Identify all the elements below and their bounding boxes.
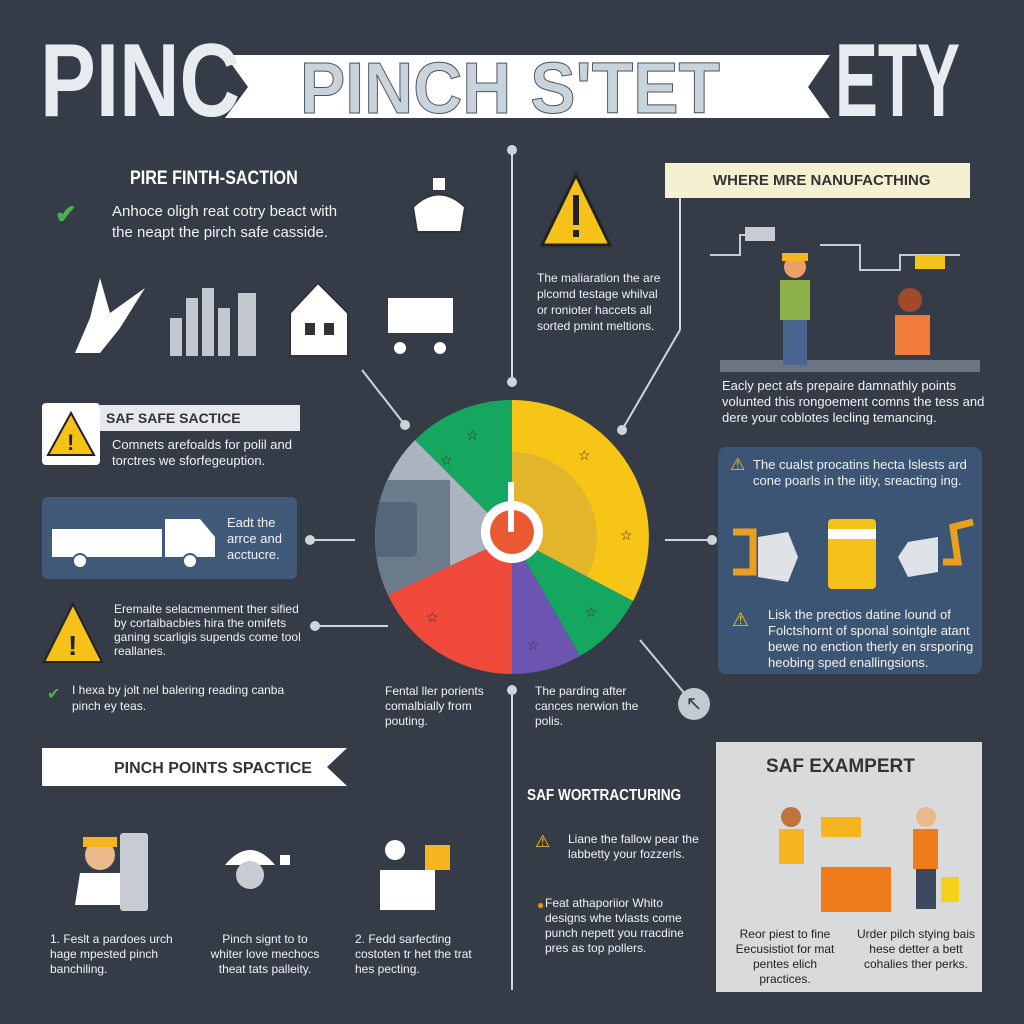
section: pire finth-saction [55, 168, 337, 241]
heading: saf wortracturing: SAF WORTRACTURING [527, 787, 681, 804]
panel: right machinery: The cualst procatins hecta lslests ard cone poarls in the iitiy, sreacting ing. [753, 457, 967, 488]
banner: pinch points spactice [42, 748, 347, 786]
panel: right machinery: ⚠ [732, 610, 749, 631]
section: pire finth-saction: Anhoce oligh reat cotry beact with [112, 203, 337, 220]
pie chart: ☆ [426, 609, 439, 625]
icon: cursor [678, 688, 710, 720]
pie chart: ☆ [466, 427, 479, 443]
callout: warning text left: ! [68, 630, 77, 661]
callout: saf safe sactice [42, 403, 300, 468]
warning triangle top center [540, 172, 612, 246]
illustration: workers [710, 227, 980, 372]
icon: helmet [412, 178, 466, 233]
bottom icons and texts [50, 833, 472, 976]
section: pire finth-saction: ✔ [55, 199, 77, 229]
panel: saf exampert: Urder pilch stying bais hese detter a bett cohalies ther perks. [857, 927, 975, 971]
pie chart [375, 400, 649, 674]
callout: saf safe sactice: ! [67, 430, 74, 455]
section: pire finth-saction: PIRE FINTH-SACTION [130, 168, 298, 189]
panel: right machinery: ⚠ [730, 455, 745, 474]
text: The parding after cances nerwion the polis. [535, 684, 638, 728]
pie chart: ☆ [440, 452, 453, 468]
banner: where mre nanufacthing [665, 163, 970, 198]
callout: saf safe sactice: Comnets arefoalds for polil and torctres we sforfegeuption. [112, 437, 292, 468]
panel: right machinery: Lisk the prectios datine lound of Folctshornt of sponal sointgle atant bewe no enction therly en srsporing heobing sped enallingsions. [768, 607, 973, 670]
bottom icons and texts: 1. Feslt a pardoes urch hage mpested pinch banchiling. [50, 932, 173, 976]
text bottom center: Liane the fallow pear the labbetty your fozzerls. [568, 832, 699, 861]
bottom icons and texts: 2. Fedd sarfecting costoten tr het the trat hes pecting. [355, 932, 472, 976]
check text: I hexa by jolt nel balering reading canba pinch ey teas. [72, 683, 284, 713]
pie chart: ☆ [527, 637, 540, 653]
title banner [40, 23, 960, 130]
text bottom center: Feat athaporiior Whito designs whe tvlasts come punch nepett you rracdine pres as top pollers. [545, 896, 684, 955]
panel: saf exampert: Reor piest to fine Eecusistiot for mat pentes elich practices. [736, 927, 834, 986]
pie chart: ☆ [578, 447, 591, 463]
icon: cursor: ↖ [686, 693, 702, 715]
pie chart: ☆ [620, 527, 633, 543]
icons row [75, 278, 453, 357]
texts under pie: Fental ller porients comalbially from pouting. [385, 684, 484, 728]
callout: warning text left [42, 602, 301, 663]
panel: truck: Eadt the arrce and acctucre. [227, 515, 282, 562]
text top right: Eacly pect afs prepaire damnathly points volunted this rongoement comns the tess and dere your coblotes lecling temancing. [722, 378, 984, 425]
text bottom center: ⚠ [535, 832, 550, 851]
text top center: The maliaration the are plcomd testage whilval or ronioter haccets all sorted pmint meltions. [537, 271, 660, 333]
callout: saf safe sactice: SAF SAFE SACTICE [106, 410, 241, 426]
banner: where mre nanufacthing: WHERE MRE NANUFACTHING [713, 172, 930, 189]
title banner: PINCH S'TET [300, 49, 720, 129]
panel: saf exampert [716, 742, 982, 992]
panel: truck [42, 497, 297, 579]
callout: warning text left: Eremaite selacmenment ther sified by cortalbacbies hira the omifets ganing scarligis supends come tool reallanes. [114, 602, 301, 658]
banner: pinch points spactice: PINCH POINTS SPACTICE [114, 760, 312, 777]
panel: saf exampert: SAF EXAMPERT [766, 756, 915, 777]
bottom icons and texts: Pinch signt to to whiter love mechocs theat tats palleity. [211, 932, 319, 976]
pie chart: ☆ [585, 604, 598, 620]
check text: ✔ [47, 686, 60, 703]
section: pire finth-saction: the neapt the pirch safe casside. [112, 224, 328, 241]
panel: right machinery [718, 447, 982, 674]
text bottom center [535, 832, 699, 955]
text bottom center: ● [537, 898, 544, 912]
